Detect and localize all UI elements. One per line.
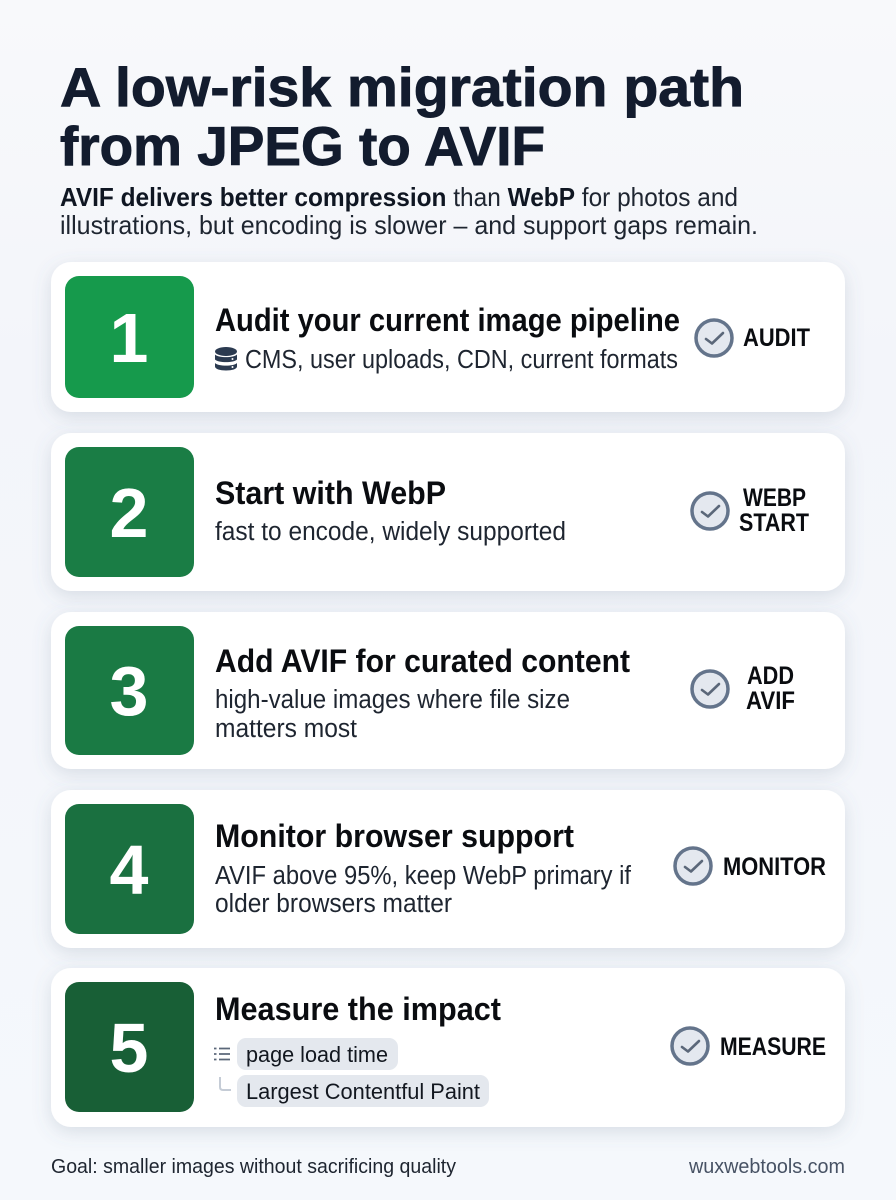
- title: from JPEG to AVIF: [60, 115, 545, 177]
- step 4 description: [215, 862, 632, 918]
- step 4 heading: Monitor browser support: [215, 818, 574, 854]
- chip: Largest Contentful Paint: Largest Contentful Paint: [246, 1079, 481, 1104]
- footer site: wuxwebtools.com: [688, 1155, 845, 1178]
- step 1 heading: Audit your current image pipeline: [215, 302, 680, 338]
- step 3 description: matters most: [215, 715, 357, 743]
- step 1 number tile: [65, 276, 194, 398]
- icon: database: [215, 347, 237, 370]
- step 5 number tile: [65, 982, 194, 1112]
- step 3 description: high-value images where file size: [215, 686, 570, 714]
- icon: check circle: [672, 1028, 708, 1064]
- step 2 number tile: 2: [110, 474, 148, 552]
- step 2 tag: [739, 484, 809, 537]
- step 3 tag: ADD: [747, 662, 794, 690]
- icon: tree connector: [220, 1077, 231, 1090]
- step 4 tag: MONITOR: [723, 853, 826, 881]
- step 3 number tile: [65, 626, 194, 755]
- title: A low-risk migration path: [60, 56, 744, 118]
- step 5 heading: Measure the impact: [215, 991, 501, 1027]
- step 1 description: CMS, user uploads, CDN, current formats: [245, 346, 678, 374]
- footer goal: Goal: smaller images without sacrificing quality: [51, 1155, 457, 1178]
- step 3 heading: Add AVIF for curated content: [215, 643, 630, 679]
- step 1 number tile: 1: [110, 299, 148, 377]
- panel: step 2: [51, 433, 845, 591]
- icon: check circle: [692, 671, 728, 707]
- step 3 tag: AVIF: [746, 687, 795, 715]
- step 3 tag: [746, 662, 795, 715]
- chip: page load time: page load time: [246, 1042, 388, 1067]
- step 2 description: fast to encode, widely supported: [215, 518, 566, 546]
- step 4 number tile: 4: [110, 831, 149, 909]
- icon: check circle: [696, 320, 732, 356]
- panel: step 3: [51, 612, 845, 769]
- step 2 heading: Start with WebP: [215, 475, 446, 511]
- icon: check circle: [692, 493, 728, 529]
- subtitle: [60, 182, 758, 240]
- subtitle: illustrations, but encoding is slower – and support gaps remain.: [60, 210, 758, 240]
- step 5 number tile: 5: [110, 1009, 148, 1087]
- step 2 tag: START: [739, 509, 809, 537]
- step 1 tag: AUDIT: [743, 324, 810, 352]
- step 4 number tile: [65, 804, 194, 934]
- step 4 description: AVIF above 95%, keep WebP primary if: [215, 862, 632, 890]
- panel: step 5: [51, 968, 845, 1127]
- icon: list: [214, 1048, 230, 1060]
- step 5 tag: MEASURE: [720, 1033, 826, 1061]
- step 2 number tile: [65, 447, 194, 577]
- title: [60, 56, 744, 177]
- step 3 description: [215, 686, 570, 743]
- panel: step 4: [51, 790, 845, 948]
- subtitle: AVIF delivers better compression than WebP for photos and: [60, 182, 738, 212]
- panel: step 1: [51, 262, 845, 412]
- step 2 tag: WEBP: [743, 484, 806, 512]
- step 4 description: older browsers matter: [215, 890, 452, 918]
- step 3 number tile: 3: [110, 652, 148, 730]
- icon: check circle: [675, 848, 711, 884]
